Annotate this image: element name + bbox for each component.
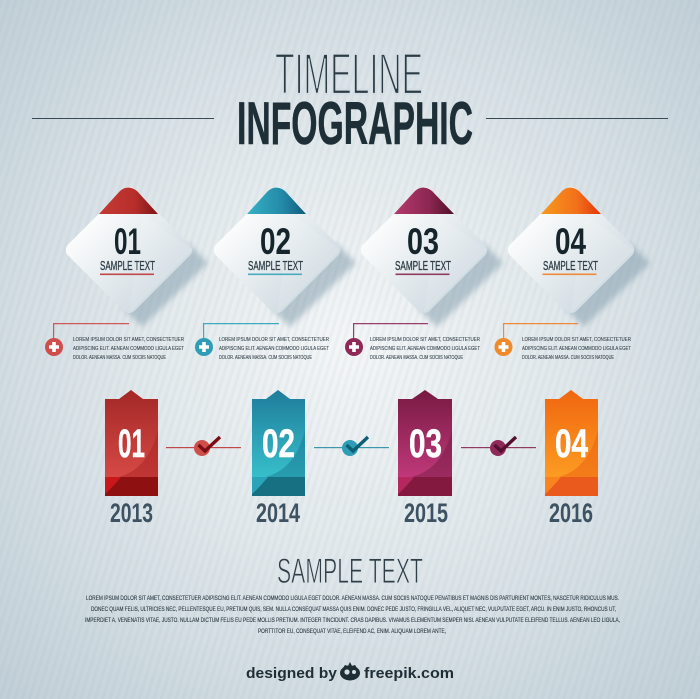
panel: diamond 04	[505, 184, 650, 327]
timeline card: 2013	[105, 390, 158, 528]
timeline card: 2013: 01	[118, 422, 145, 466]
title: TIMELINE	[275, 42, 423, 107]
panel: diamond 01: 01	[114, 221, 141, 262]
footer credit: designed by	[246, 665, 338, 682]
timeline card: 2016	[545, 390, 598, 528]
text block: lorem ipsum	[85, 595, 620, 635]
timeline card: 2014: 2014	[256, 498, 300, 528]
callout: note 03: DOLOR. AENEAN MASSA. CUM SOCIIS NATOQUE	[370, 355, 463, 361]
text block: lorem ipsum: PORTTITOR EU, CONSEQUAT VITAE, ELEIFEND AC, ENIM. ALIQUAM LOREM ANTE,	[258, 628, 446, 635]
title	[32, 42, 668, 157]
connector check 1	[166, 437, 241, 456]
panel: diamond 03: 03	[407, 221, 439, 262]
timeline card: 2013: 2013	[110, 498, 153, 528]
callout: note 04: ADIPISCING ELIT. AENEAN COMMODO LIGULA EGET	[522, 346, 632, 352]
timeline card: 2015: 03	[409, 422, 442, 466]
callout: note 02: ADIPISCING ELIT. AENEAN COMMODO LIGULA EGET	[219, 346, 330, 352]
timeline card: 2014	[252, 390, 305, 528]
callout: note 01	[45, 323, 185, 361]
timeline card: 2016: 04	[555, 422, 589, 466]
callout: note 04: DOLOR. AENEAN MASSA. CUM SOCIIS NATOQUE	[522, 355, 614, 361]
timeline card: 2014: 02	[262, 422, 295, 466]
callout: note 02	[195, 323, 330, 361]
panel: diamond 03: SAMPLE TEXT	[395, 258, 451, 273]
callout: note 03: ADIPISCING ELIT. AENEAN COMMODO LIGULA EGET	[370, 346, 481, 352]
callout: note 03: LOREM IPSUM DOLOR SIT AMET, CONSECTETUER	[370, 337, 480, 343]
panel: diamond 04: SAMPLE TEXT	[543, 258, 598, 273]
timeline card: 2015	[398, 390, 452, 528]
timeline card: 2016: 2016	[549, 498, 593, 528]
footer credit: freepik.com	[364, 665, 454, 682]
callout: note 01: ADIPISCING ELIT. AENEAN COMMODO LIGULA EGET	[73, 346, 185, 352]
callout: note 02: DOLOR. AENEAN MASSA. CUM SOCIIS NATOQUE	[219, 355, 312, 361]
heading: sample text: SAMPLE TEXT	[277, 552, 423, 591]
panel: diamond 01	[63, 184, 208, 327]
panel: diamond 02: SAMPLE TEXT	[248, 258, 303, 273]
callout: note 01: LOREM IPSUM DOLOR SIT AMET, CONSECTETUER	[73, 337, 184, 343]
panel: diamond 01: SAMPLE TEXT	[100, 258, 155, 273]
timeline card: 2015: 2015	[404, 498, 448, 528]
callout: note 04: LOREM IPSUM DOLOR SIT AMET, CONSECTETUER	[522, 337, 631, 343]
connector check 3	[461, 437, 536, 456]
panel: diamond 02	[211, 184, 356, 327]
callout: note 04	[494, 323, 632, 361]
callout: note 03	[345, 323, 481, 361]
panel: diamond 02: 02	[260, 221, 291, 262]
connector check 2	[314, 437, 389, 456]
panel: diamond 04: 04	[555, 221, 586, 262]
footer credit	[246, 662, 454, 682]
title: INFOGRAPHIC	[237, 90, 473, 157]
icon: freepik logo	[340, 662, 360, 680]
callout: note 01: DOLOR. AENEAN MASSA. CUM SOCIIS NATOQUE	[73, 355, 166, 361]
callout: note 02: LOREM IPSUM DOLOR SIT AMET, CONSECTETUER	[219, 337, 329, 343]
panel: diamond 03	[358, 184, 503, 327]
